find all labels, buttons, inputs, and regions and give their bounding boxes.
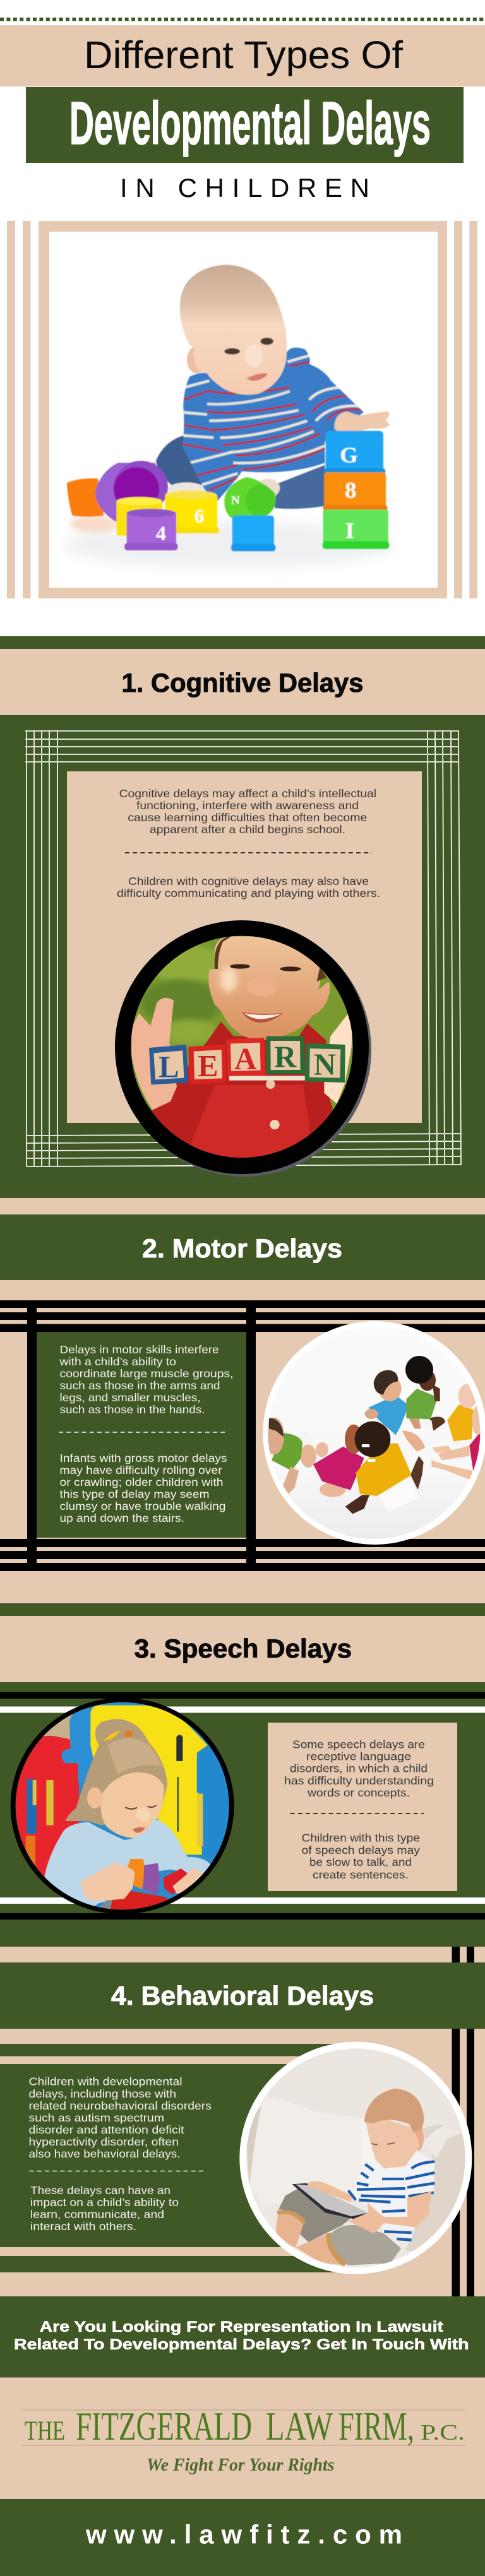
speech text (284, 1738, 434, 1881)
title line 3: IN CHILDREN (120, 173, 369, 203)
header: title block (0, 25, 485, 203)
shorts and legs (276, 2187, 401, 2266)
tablet (292, 2183, 369, 2219)
photo: boy holding LEARN blocks (115, 920, 371, 1177)
behavioral text: disorder and attention deficit (29, 2123, 184, 2136)
motor text: legs, and smaller muscles, (59, 1391, 201, 1404)
photo: babies crawling in a circle (259, 1319, 485, 1546)
toy cups: N (231, 494, 240, 507)
speech text: Children with this type (302, 1832, 420, 1844)
section heading: 2. Motor Delays: 2. Motor Delays (142, 1233, 342, 1263)
LEARN blocks: L (159, 1051, 179, 1084)
motor text: Infants with gross motor delays (59, 1452, 227, 1464)
section heading: 4. Behavioral Delays: 4. Behavioral Delays (111, 1981, 374, 2010)
motor text: such as those in the arms and (59, 1379, 220, 1392)
law firm logo panel (0, 2377, 485, 2499)
motor text: with a child’s ability to (59, 1355, 176, 1368)
motor text: up and down the stairs. (59, 1512, 184, 1524)
motor text: such as those in the hands. (59, 1403, 205, 1416)
behavioral text: Children with developmental (29, 2075, 182, 2088)
head (364, 2089, 424, 2168)
motor text: coordinate large muscle groups, (59, 1367, 234, 1380)
speech text: words or concepts. (307, 1786, 410, 1799)
behavioral text: interact with others. (30, 2220, 136, 2233)
hero photo: baby with stacking cups (64, 265, 394, 568)
cognitive text: Children with cognitive delays may also have (128, 875, 369, 887)
section heading: 1. Cognitive Delays (0, 649, 485, 715)
hair and face (65, 1719, 167, 1838)
behavioral text: also have behavioral delays. (29, 2147, 181, 2160)
firm tagline: We Fight For Your Rights (147, 2455, 335, 2475)
panel: speech delays (0, 1682, 485, 1947)
toy cups (67, 431, 390, 552)
call to action panel (0, 2296, 485, 2377)
speech text: be slow to talk, and (309, 1856, 412, 1868)
dotted top border (0, 18, 485, 21)
firm name: P.C. (421, 2420, 465, 2445)
speech text: of speech delays may (302, 1844, 420, 1856)
website footer: www.lawfitz.com (85, 2520, 402, 2549)
tan text card (268, 1723, 457, 1891)
speech text: Some speech delays are (292, 1738, 425, 1751)
toy cups: G (340, 442, 358, 467)
firm name: FIRM, (338, 2404, 414, 2448)
panel: behavioral delays background (0, 1947, 485, 2296)
title line 1: Different Types Of (84, 33, 404, 76)
green text card (37, 1332, 246, 1538)
arm and hand (349, 2192, 431, 2234)
white line grid frame (25, 731, 462, 1166)
behavioral text: delays, including those with (29, 2087, 176, 2100)
toy cups: 6 (195, 505, 204, 526)
toy cups: 4 (156, 523, 166, 545)
cognitive text: functioning, interfere with awareness and (136, 799, 359, 812)
motor text: Delays in motor skills interfere (59, 1343, 219, 1356)
behavioral text: These delays can have an (30, 2184, 171, 2197)
baby from behind, yellow shirt (345, 1422, 424, 1514)
firm name: THE (25, 2416, 65, 2446)
toy blocks and hands (80, 1859, 203, 1910)
panel: cognitive delays (0, 715, 485, 1198)
speech text: disorders, in which a child (290, 1762, 428, 1775)
crawling baby, green shirt (264, 1418, 328, 1494)
baby head (180, 265, 287, 395)
band: green strip above section 3 (0, 1603, 485, 1616)
speech text: create sentences. (313, 1868, 409, 1881)
sitting baby, pink shirt right (431, 1406, 485, 1480)
LEARN blocks: A (234, 1043, 256, 1076)
striped shirt (349, 2152, 434, 2241)
firm name (25, 2404, 465, 2448)
behavioral text (29, 2075, 212, 2233)
section heading: 2. Motor Delays (0, 1214, 485, 1280)
photo: toddler girl with building blocks (6, 1695, 237, 1919)
cognitive text: cause learning difficulties that often become (128, 811, 367, 824)
cognitive text: difficulty communicating and playing with others. (117, 887, 380, 899)
panel: motor delays (0, 1280, 485, 1603)
toy cups: 8 (345, 477, 357, 502)
behavioral text: learn, communicate, and (30, 2208, 164, 2221)
band: tan strip (0, 1198, 485, 1214)
call to action panel: Related To Developmental Delays? Get In Touch With (14, 2336, 469, 2353)
toy cups: I (345, 518, 354, 543)
motor text: clumsy or have trouble walking (59, 1500, 226, 1512)
tan text card (67, 771, 422, 1123)
LEARN blocks: R (274, 1040, 297, 1074)
speech text: receptive language (306, 1750, 411, 1762)
sitting baby, green shirt (405, 1356, 445, 1431)
section heading: 3. Speech Delays: 3. Speech Delays (135, 1634, 352, 1663)
call to action panel: Are You Looking For Representation In Lawsuit (40, 2318, 443, 2336)
firm name: FITZGERALD (76, 2404, 252, 2448)
LEARN blocks: N (314, 1048, 336, 1081)
photo: toddler reading a tablet on sofa (237, 2040, 474, 2277)
motor text: this type of delay may seem (59, 1488, 210, 1500)
sitting baby, yellow shirt right (432, 1384, 477, 1460)
cognitive text: apparent after a child begins school. (150, 823, 345, 836)
behavioral text: impact on a child’s ability to (30, 2196, 179, 2209)
behavioral text: related neurobehavioral disorders (29, 2099, 212, 2112)
hero image frame (7, 221, 477, 598)
motor text: or crawling; older children with (59, 1476, 224, 1488)
motor text: may have difficulty rolling over (59, 1464, 222, 1476)
motor text (59, 1343, 234, 1524)
LEARN blocks: E (198, 1050, 218, 1083)
section heading: 1. Cognitive Delays: 1. Cognitive Delays (121, 668, 364, 697)
website footer (0, 2499, 485, 2576)
firm name: LAW (266, 2404, 333, 2448)
black plaid bars (0, 1300, 485, 1571)
LEARN blocks (149, 1036, 345, 1084)
band: green strip above section 1 (0, 636, 485, 649)
behavioral text: such as autism spectrum (29, 2111, 164, 2124)
cognitive text: Cognitive delays may affect a child’s intellectual (119, 787, 376, 800)
behavioral text: hyperactivity disorder, often (29, 2135, 179, 2148)
section heading: 4. Behavioral Delays (0, 1962, 485, 2029)
section heading: 3. Speech Delays (0, 1616, 485, 1682)
sitting baby, blue shirt (365, 1370, 425, 1452)
shirt (44, 1819, 212, 1909)
speech text: has difficulty understanding (284, 1774, 434, 1787)
crawling baby, pink shirt (311, 1425, 364, 1497)
cognitive text (117, 787, 380, 899)
